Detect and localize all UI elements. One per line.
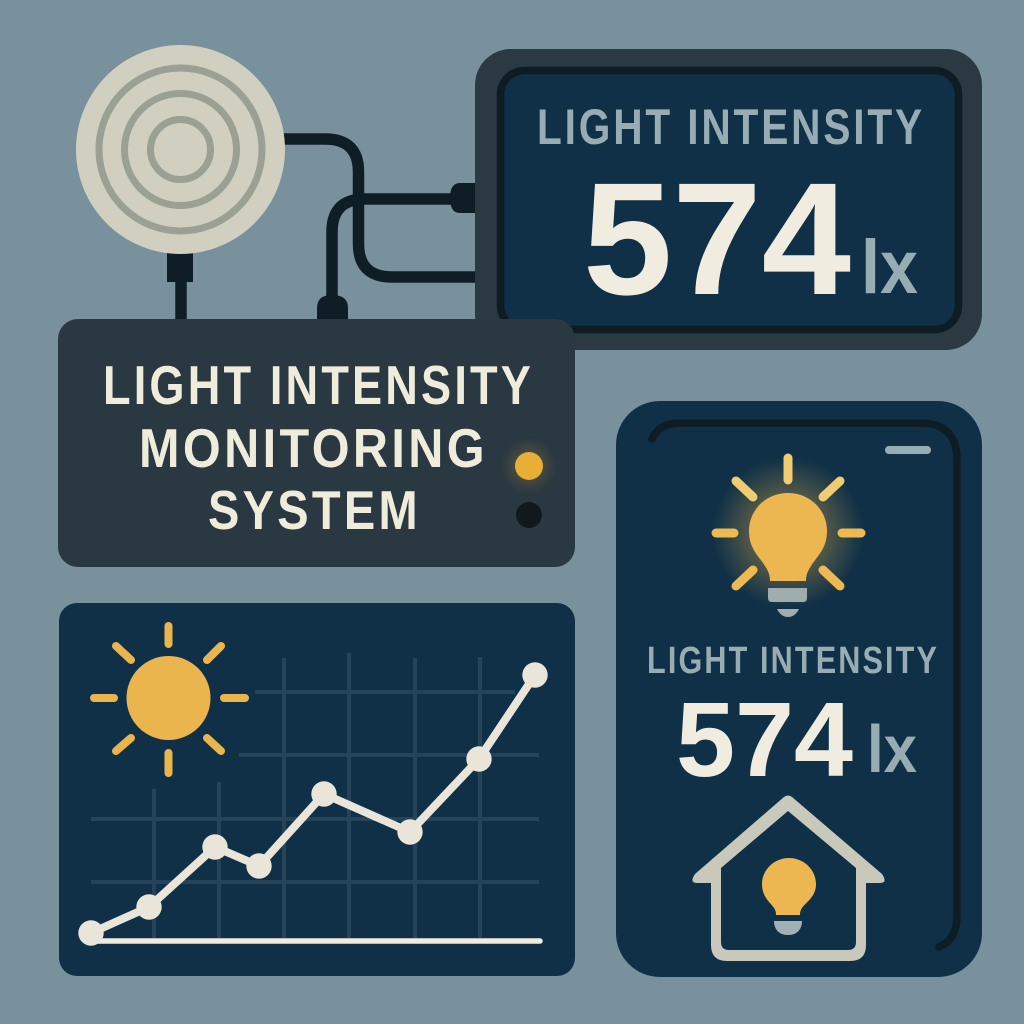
display heading: LIGHT INTENSITY bbox=[537, 99, 925, 155]
panel: light intensity display bbox=[475, 49, 982, 350]
panel: chart bbox=[59, 603, 575, 976]
system title: LIGHT INTENSITY bbox=[103, 354, 534, 416]
display value: 574 bbox=[583, 149, 851, 328]
icon: sun bbox=[94, 626, 245, 773]
grid bbox=[91, 653, 539, 938]
line series bbox=[78, 662, 548, 946]
display unit: lx bbox=[861, 225, 918, 310]
system title bbox=[103, 354, 534, 541]
status LEDs bbox=[501, 438, 557, 528]
panel: phone bbox=[616, 401, 982, 977]
phone value: 574 bbox=[676, 681, 853, 799]
connectors bbox=[167, 183, 480, 322]
cables bbox=[181, 139, 480, 325]
chart axis bbox=[91, 938, 540, 944]
icon: house with bulb bbox=[692, 796, 885, 961]
panel: system title box bbox=[58, 319, 575, 567]
phone unit: lx bbox=[867, 712, 917, 787]
icon: light bulb bbox=[712, 457, 864, 617]
phone heading: LIGHT INTENSITY bbox=[647, 640, 939, 682]
system title: SYSTEM bbox=[208, 479, 421, 541]
system title: MONITORING bbox=[139, 417, 488, 479]
sensor disc bbox=[76, 45, 285, 254]
